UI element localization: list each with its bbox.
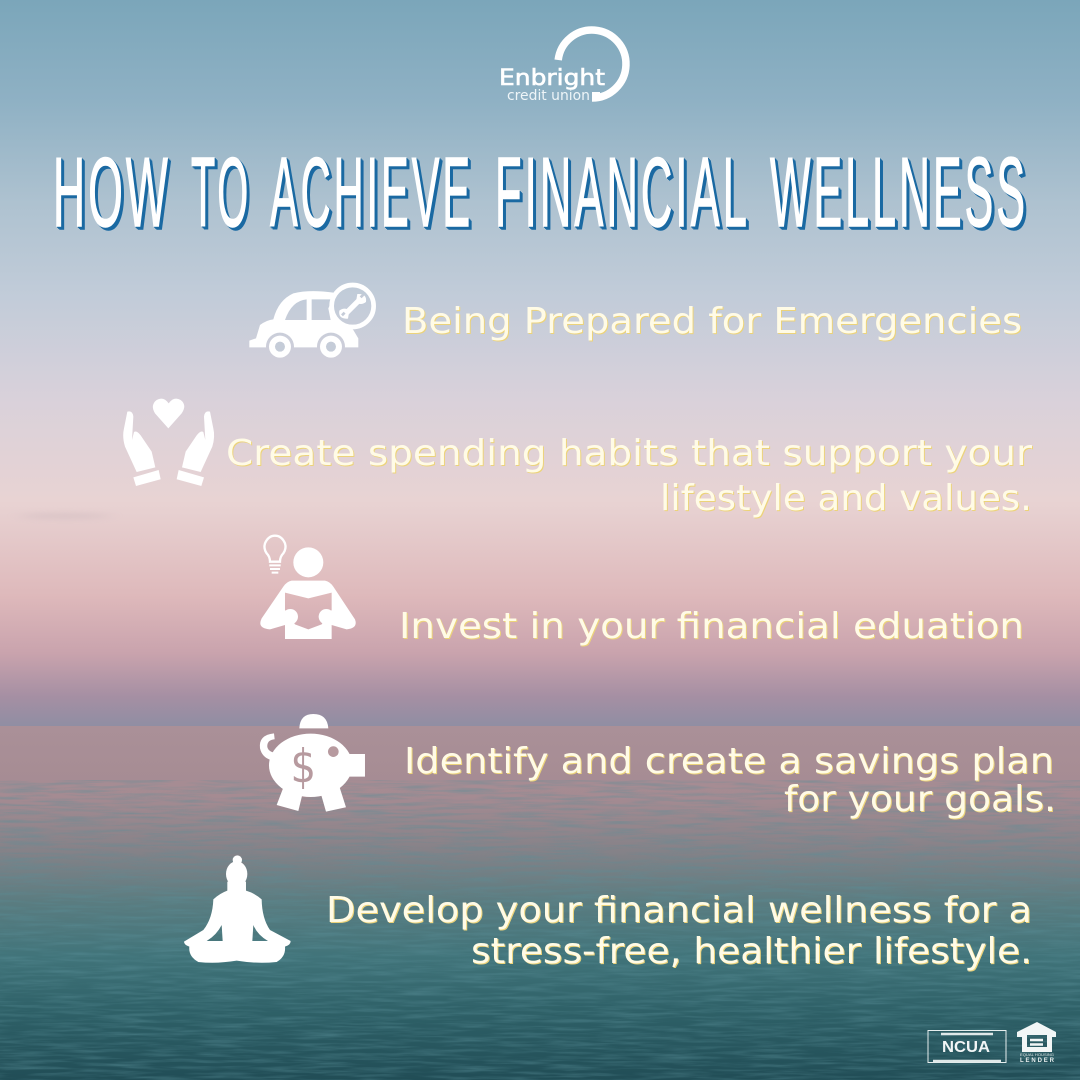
title: ACHIEVE xyxy=(270,137,473,247)
title: HOW xyxy=(53,137,171,247)
icon: meditating figure xyxy=(184,855,291,963)
logo: NCUA: NCUA xyxy=(942,1039,990,1056)
text: savings plan: Identify and create a savings plan xyxy=(404,741,1054,782)
logo: Enbright Credit Union xyxy=(499,30,626,104)
text: spending habits: lifestyle and values. xyxy=(660,478,1032,519)
text: savings plan xyxy=(404,741,1056,820)
text: stress-free lifestyle: stress-free, healthier lifestyle. xyxy=(471,931,1032,972)
text: spending habits xyxy=(226,433,1032,519)
text: spending habits: Create spending habits that support your xyxy=(226,433,1032,474)
text: stress-free lifestyle xyxy=(326,890,1032,972)
icon: piggy bank: $ xyxy=(291,741,316,794)
text: savings plan: for your goals. xyxy=(784,779,1056,820)
background: sea xyxy=(0,726,1080,1080)
icon: car with wrench xyxy=(249,285,374,358)
icon: piggy bank xyxy=(260,714,365,812)
title xyxy=(53,137,1028,247)
logo: equal housing lender: EQUAL HOUSING xyxy=(1020,1052,1054,1057)
icon: hands holding heart xyxy=(123,399,214,486)
logo: equal housing lender: LENDER xyxy=(1020,1058,1055,1064)
background: sea ripples xyxy=(0,780,1080,1080)
logo: Enbright Credit Union: Enbright xyxy=(499,66,605,91)
background: sky xyxy=(0,0,1080,726)
title: TO xyxy=(191,137,251,247)
text: financial education: Invest in your financial eduation xyxy=(399,606,1024,647)
text: stress-free lifestyle: Develop your financial wellness for a xyxy=(326,890,1032,931)
icon: person reading with lightbulb xyxy=(260,536,356,639)
text: being prepared: Being Prepared for Emergencies xyxy=(402,301,1022,342)
logo: NCUA xyxy=(928,1030,1006,1062)
title: FINANCIAL xyxy=(495,137,750,247)
logo: equal housing lender xyxy=(1017,1022,1056,1064)
logo: Enbright Credit Union: credit union xyxy=(507,88,590,104)
background: faint cloud xyxy=(20,513,110,519)
